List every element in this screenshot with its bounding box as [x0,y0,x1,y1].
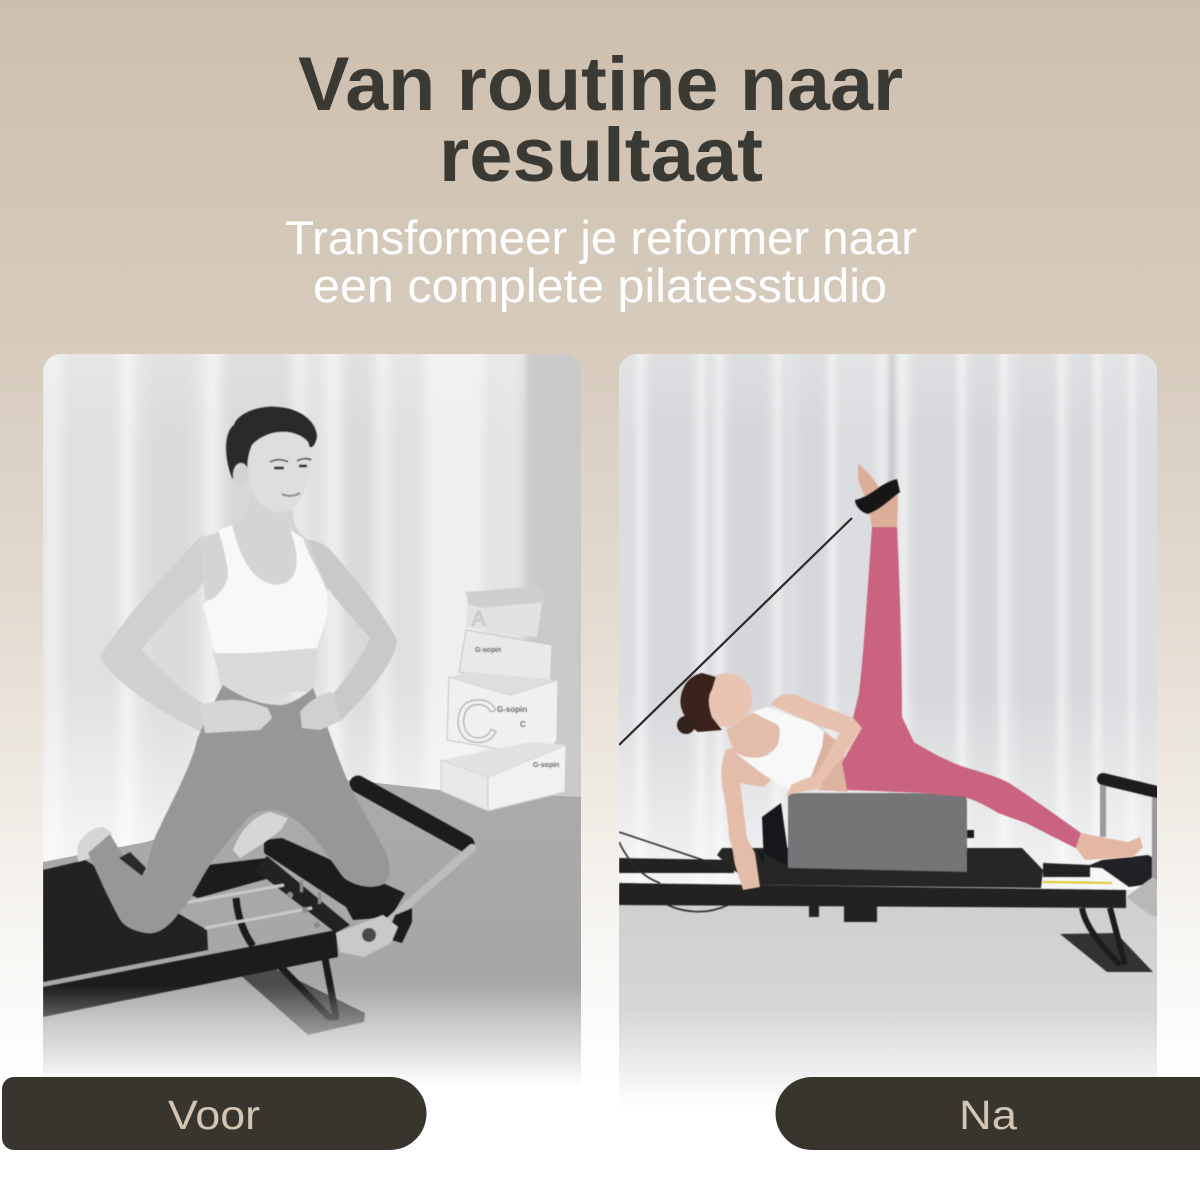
woman side stretch [677,463,1143,890]
shoulder pad [757,803,790,867]
padded box [757,793,974,872]
end block [1085,855,1157,887]
curtains [619,340,1157,900]
label: Na [775,1077,1200,1150]
foot bar [1103,779,1157,792]
belly [808,730,848,792]
raised foot [858,463,898,527]
label: Na: Na [959,1092,1017,1138]
curtains [30,340,525,870]
metal arm [385,848,472,925]
leggings [88,685,390,933]
bracket [392,908,413,944]
front rail [43,930,338,1017]
feet [77,812,288,862]
ear [232,462,248,482]
shoulder rest [119,852,146,876]
spring bars [184,885,312,928]
subtitle: Transformeer je reformer naar [285,211,917,264]
title: Van routine naar [298,42,903,127]
spring [1043,882,1112,883]
supporting arm [721,745,790,890]
subtitle: een complete pilatesstudio [313,259,887,312]
storage boxes: C [455,688,498,755]
sports bra [203,525,328,653]
facial features [270,459,311,496]
storage boxes: A [472,608,486,630]
carriage pad [717,848,1043,888]
reformer machine [619,779,1157,972]
panel: before photo [30,340,581,1106]
label: Voor: Voor [168,1092,260,1138]
side rail [255,856,350,933]
foot strap [855,479,900,514]
resistance rope [619,518,852,745]
hair [680,673,722,732]
midriff [213,649,312,692]
floor [43,780,581,1066]
rear rail [191,858,270,898]
lower foot [1076,833,1143,860]
cables [619,832,733,912]
bottom fade [619,1010,1157,1110]
frame supports [236,898,336,1017]
front support [1082,908,1125,965]
neck and shoulders [204,509,328,600]
storage boxes: G-sopin [533,762,559,769]
right hand [300,692,342,730]
woman kneeling [77,407,397,933]
title: resultaat [439,113,763,198]
carriage pad [43,860,208,982]
face [248,432,310,512]
foot mat [238,967,365,1035]
neck and chest [726,710,780,757]
bottom white [415,1087,581,1100]
left arm [100,536,204,731]
knob [967,830,974,838]
shoulder block [264,838,405,920]
storage boxes: G-sopin [497,705,527,714]
bottom white [619,1108,1157,1128]
panel: after photo [619,340,1157,1128]
storage boxes [441,586,566,811]
face [691,665,761,735]
storage boxes: C [520,720,526,729]
sports bra [729,707,824,790]
bun [677,716,695,734]
bottom fade [43,985,581,1087]
hair [226,407,317,482]
left hand [200,700,272,733]
subtitle [285,211,917,312]
metal plate [336,915,398,957]
floor [619,900,1157,1004]
metal posts [1103,785,1155,887]
roller bar [358,784,466,844]
title [298,42,903,198]
leggings [842,527,1081,848]
rails [619,858,1126,922]
foot mat [1060,933,1153,972]
metal plate [1126,877,1157,917]
gray block [788,793,967,872]
spring hooks [287,880,321,928]
right arm [306,540,397,722]
upper arm [771,694,862,797]
label: Voor [2,1077,426,1150]
hub [362,928,376,942]
storage boxes: G-sopin [475,647,501,654]
reformer machine [43,784,472,1035]
